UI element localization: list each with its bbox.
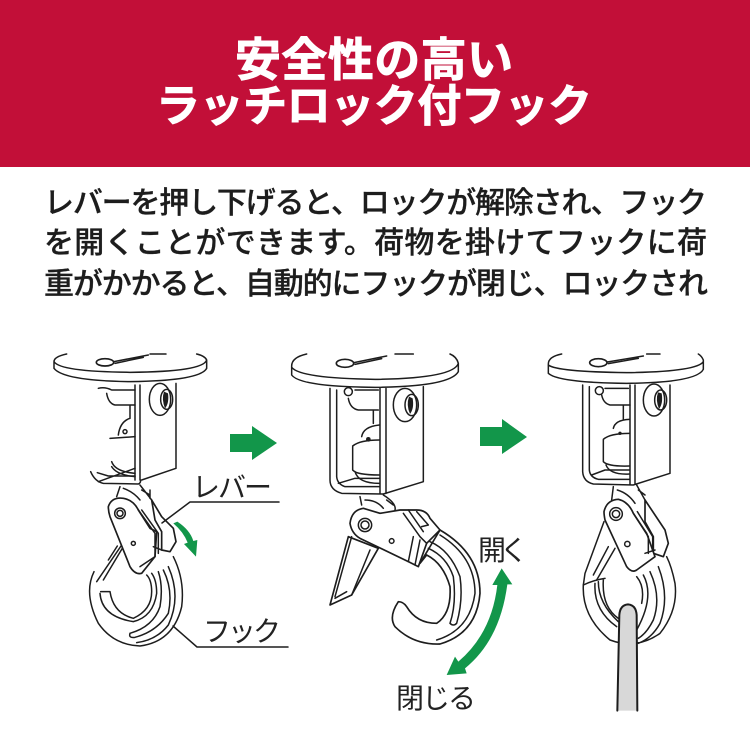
hook 3: locked with rope	[548, 354, 703, 711]
title banner: 安全性の高い	[235, 34, 513, 86]
arrow: step 2 to 3	[480, 419, 527, 454]
description text: レバーを押し下げると、ロックが解除され、フック	[44, 187, 707, 220]
title banner	[0, 0, 750, 167]
hook 2: open	[292, 354, 480, 644]
description text: を開くことができます。荷物を掛けてフックに荷	[44, 227, 707, 260]
label: hook: フック	[203, 616, 281, 647]
icon: open close double arrow	[447, 568, 512, 675]
label: lever: レバー	[192, 472, 272, 503]
hook 1: lever pressed	[54, 354, 207, 646]
title banner: ラッチロック付フック	[156, 82, 592, 131]
label: open: 開く	[478, 535, 528, 566]
icon: small lever arrow	[173, 522, 197, 557]
label: lever	[162, 472, 279, 523]
description text: 重がかかると、自動的にフックが閉じ、ロックされ	[44, 268, 708, 301]
description text	[44, 187, 708, 301]
label: hook	[173, 616, 288, 647]
label: close: 閉じる	[396, 683, 476, 714]
arrow: step 1 to 2	[230, 426, 277, 460]
